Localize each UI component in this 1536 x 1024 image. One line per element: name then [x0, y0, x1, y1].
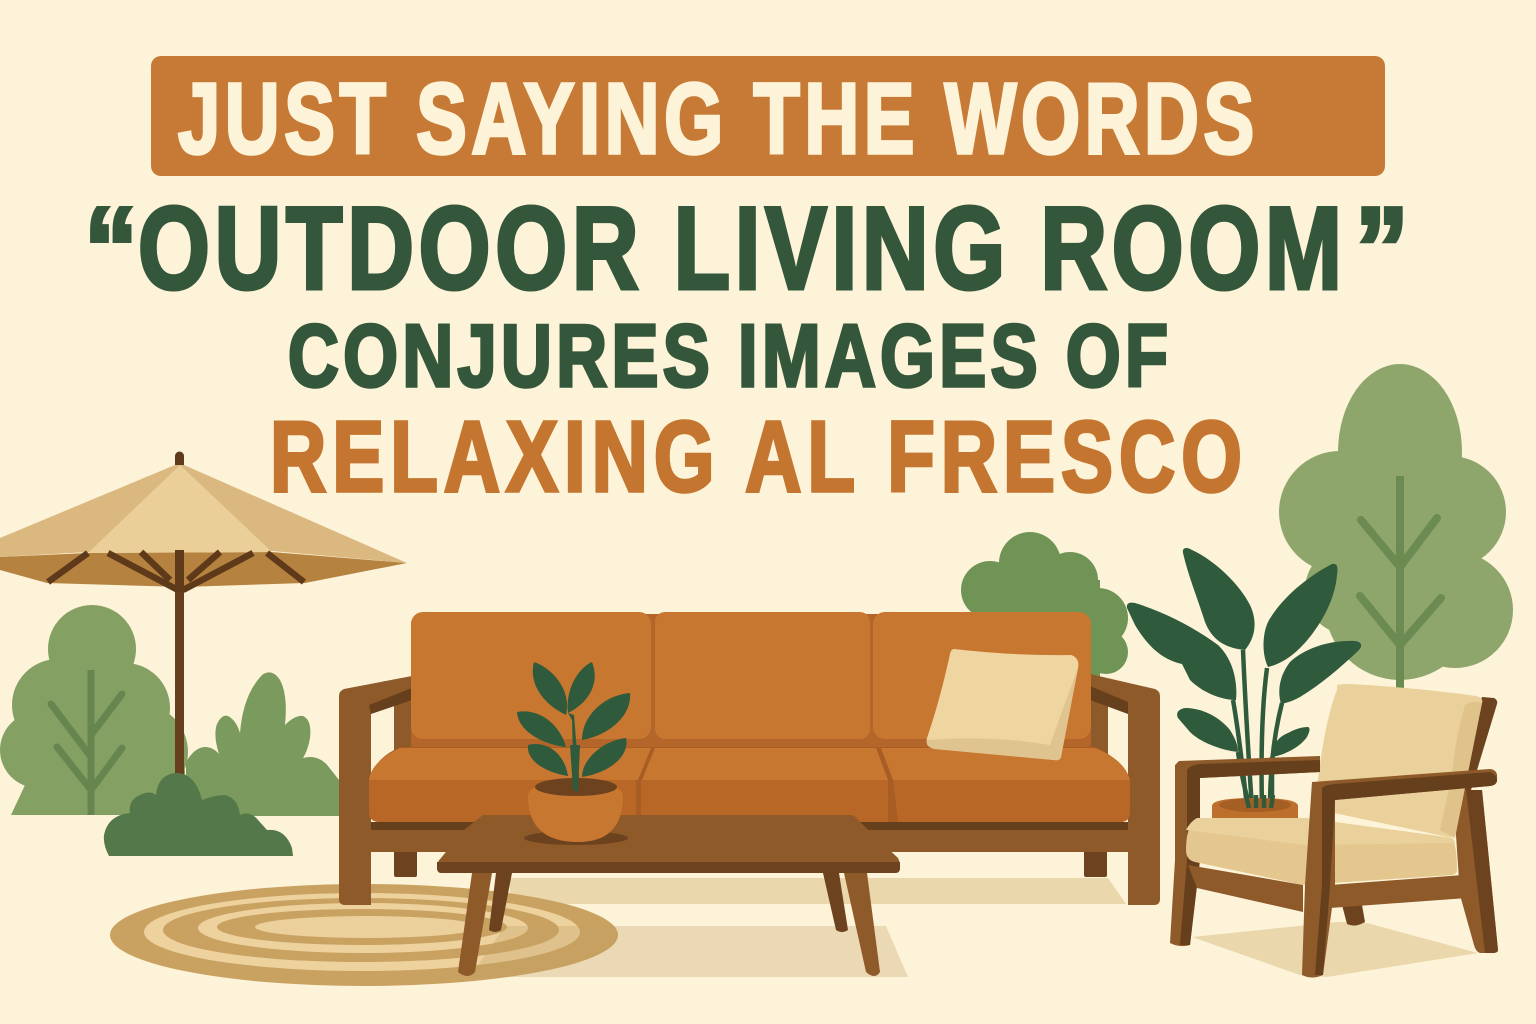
heading: outdoor living room: “ [84, 182, 138, 313]
heading: relaxing al fresco: RELAXING AL FRESCO [270, 402, 1242, 513]
title banner: JUST SAYING THE WORDS [178, 63, 1254, 174]
back short leg [1342, 905, 1365, 926]
sofa back legs [394, 850, 1107, 877]
table legs [458, 873, 880, 976]
tree: left [0, 605, 188, 815]
back frame [1450, 697, 1497, 790]
leaves [517, 662, 630, 792]
sofa [339, 612, 1160, 905]
table floor shadow [470, 926, 908, 977]
rear right post [1453, 790, 1498, 953]
chair shadow [1192, 922, 1478, 977]
pot [528, 745, 623, 842]
side rails [1188, 865, 1467, 912]
small potted plant on table [517, 662, 630, 845]
tropical plant [1127, 548, 1361, 819]
sofa arms [339, 674, 1160, 905]
heading: conjures images of: CONJURES IMAGES OF [288, 306, 1168, 405]
back cushion [1318, 684, 1482, 838]
heading: outdoor living room: OUTDOOR LIVING ROOM [138, 184, 1342, 314]
front post and arm [1302, 769, 1497, 978]
rug [110, 884, 618, 986]
sofa back posts [394, 700, 1108, 760]
rear left post and arm [1170, 756, 1320, 946]
pillow [927, 649, 1078, 760]
sofa rail [371, 822, 1128, 852]
bush: front dark [104, 773, 293, 856]
sofa floor shadow [510, 878, 1126, 904]
umbrella [0, 452, 407, 775]
table top [437, 815, 900, 873]
tree: right background [1279, 364, 1513, 690]
seat cushion [1186, 818, 1457, 885]
plant pot [1212, 795, 1298, 819]
seat cushions [369, 747, 1130, 822]
bush: behind sofa [961, 532, 1128, 680]
heading: outdoor living room: ” [1355, 182, 1409, 313]
back cushions [411, 612, 1091, 754]
bush: middle [186, 672, 339, 816]
armchair [1170, 684, 1498, 978]
coffee table [437, 815, 900, 976]
